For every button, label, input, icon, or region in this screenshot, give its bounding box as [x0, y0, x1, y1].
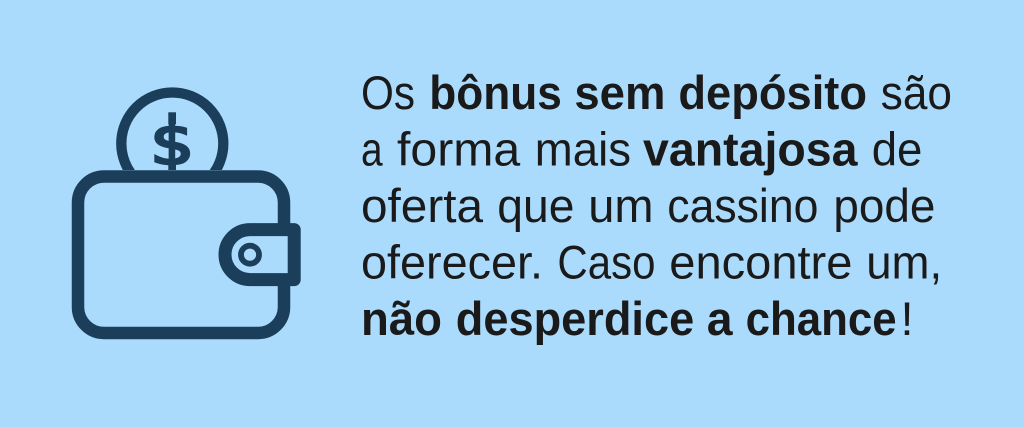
text line 4 [361, 236, 942, 288]
text line 3: pode [833, 179, 935, 232]
text line 3 [361, 179, 935, 232]
icon: wallet body [78, 176, 284, 333]
text line 5: a [707, 292, 733, 345]
text line 5: chance [746, 292, 897, 345]
text line 5 [361, 292, 914, 345]
text line 1 [361, 66, 952, 119]
icon: wallet clasp [225, 230, 294, 280]
text line 3: um [588, 179, 654, 232]
text line 1: depósito [678, 66, 867, 119]
text line 2: a [361, 122, 383, 176]
text line 2: mais [535, 122, 631, 176]
text line 5: desperdice [456, 292, 694, 345]
text line 1: bônus [429, 66, 562, 119]
text line 2 [361, 122, 922, 176]
text line 4: oferecer. [361, 236, 543, 288]
text line 3: cassino [667, 179, 818, 232]
text line 4: Caso [557, 236, 656, 288]
text line 2: de [872, 122, 922, 176]
text line 4: um, [866, 236, 942, 288]
text line 3: oferta [361, 179, 484, 232]
text block: message [361, 66, 952, 345]
text line 5: ! [900, 292, 914, 345]
text line 2: forma [397, 122, 521, 176]
text line 3: que [497, 179, 574, 232]
text line 1: Os [361, 66, 415, 119]
text line 4: encontre [669, 236, 852, 288]
text line 1: são [881, 66, 952, 119]
icon: dollar coin: $ [150, 111, 194, 177]
text line 1: sem [574, 66, 665, 119]
icon: wallet with dollar coin [78, 92, 294, 333]
text line 2: vantajosa [643, 122, 858, 176]
text line 5: não [361, 292, 442, 345]
icon: dollar coin [116, 87, 228, 170]
